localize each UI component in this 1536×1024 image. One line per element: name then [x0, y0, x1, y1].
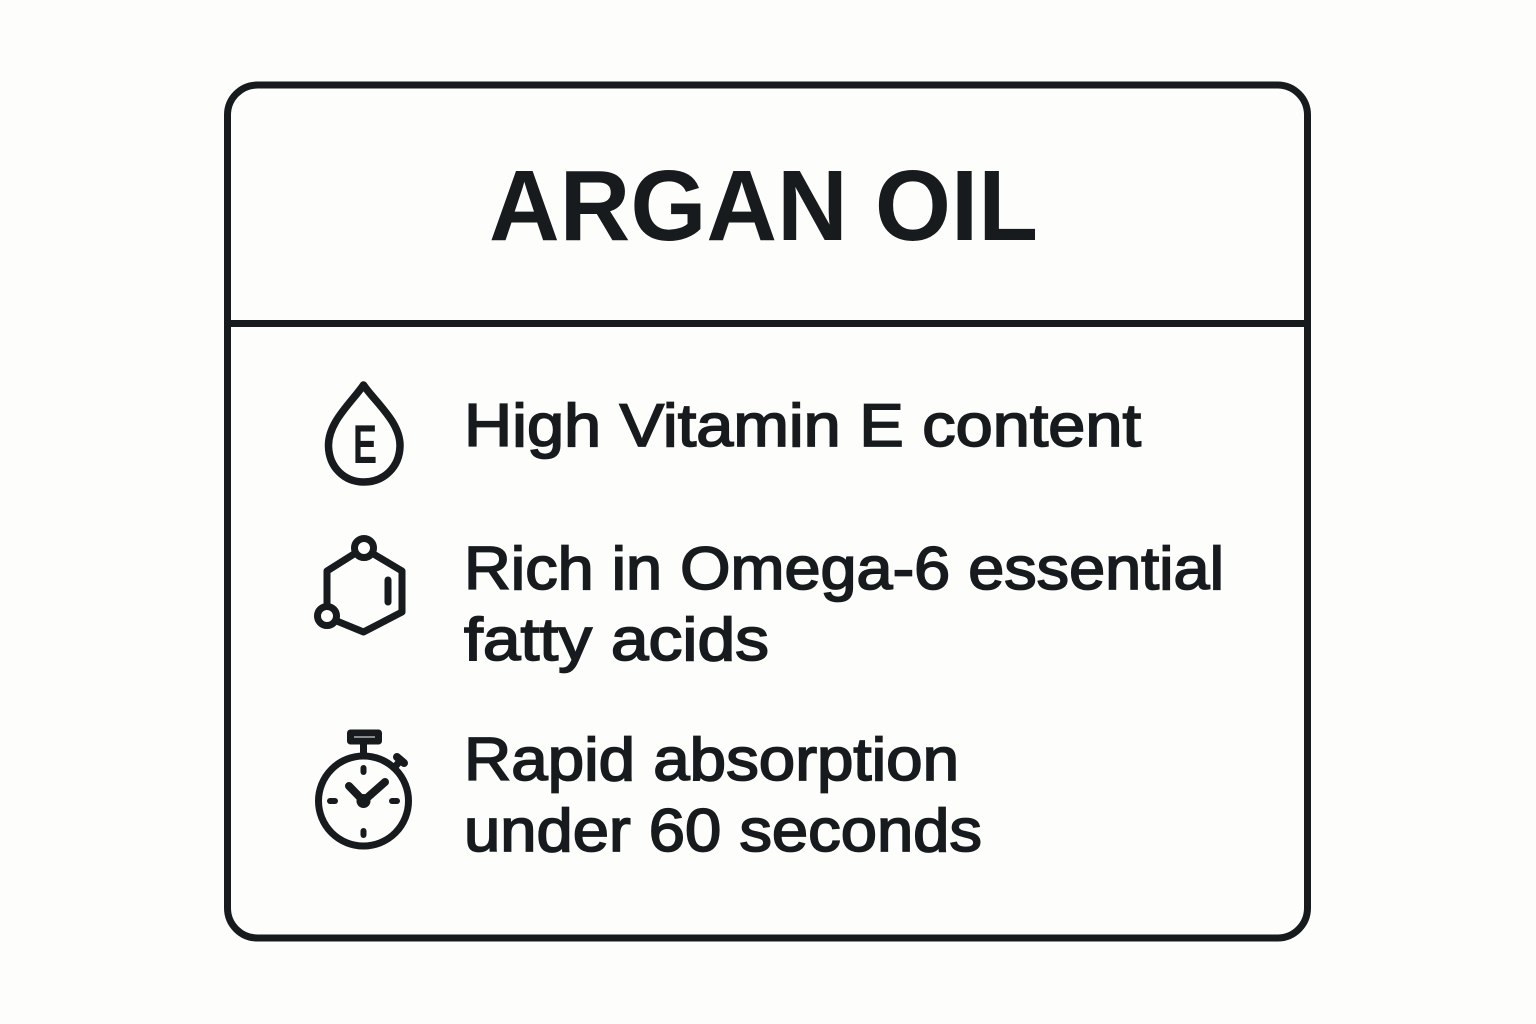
icon: vitamin E drop — [328, 385, 400, 482]
panel: argan oil card: fatty acids — [464, 606, 769, 673]
icon: molecule — [318, 538, 402, 632]
icon: vitamin E drop: E — [353, 413, 377, 475]
text: omega-6: Rich in Omega-6 essential — [464, 535, 1224, 602]
title: ARGAN OIL — [489, 150, 1038, 262]
text: absorption: Rapid absorption — [464, 726, 959, 793]
panel: argan oil card: under 60 seconds — [464, 797, 982, 864]
icon: stopwatch — [318, 733, 408, 846]
text: vitamin E: High Vitamin E content — [464, 392, 1141, 459]
panel: argan oil card — [228, 85, 1308, 938]
